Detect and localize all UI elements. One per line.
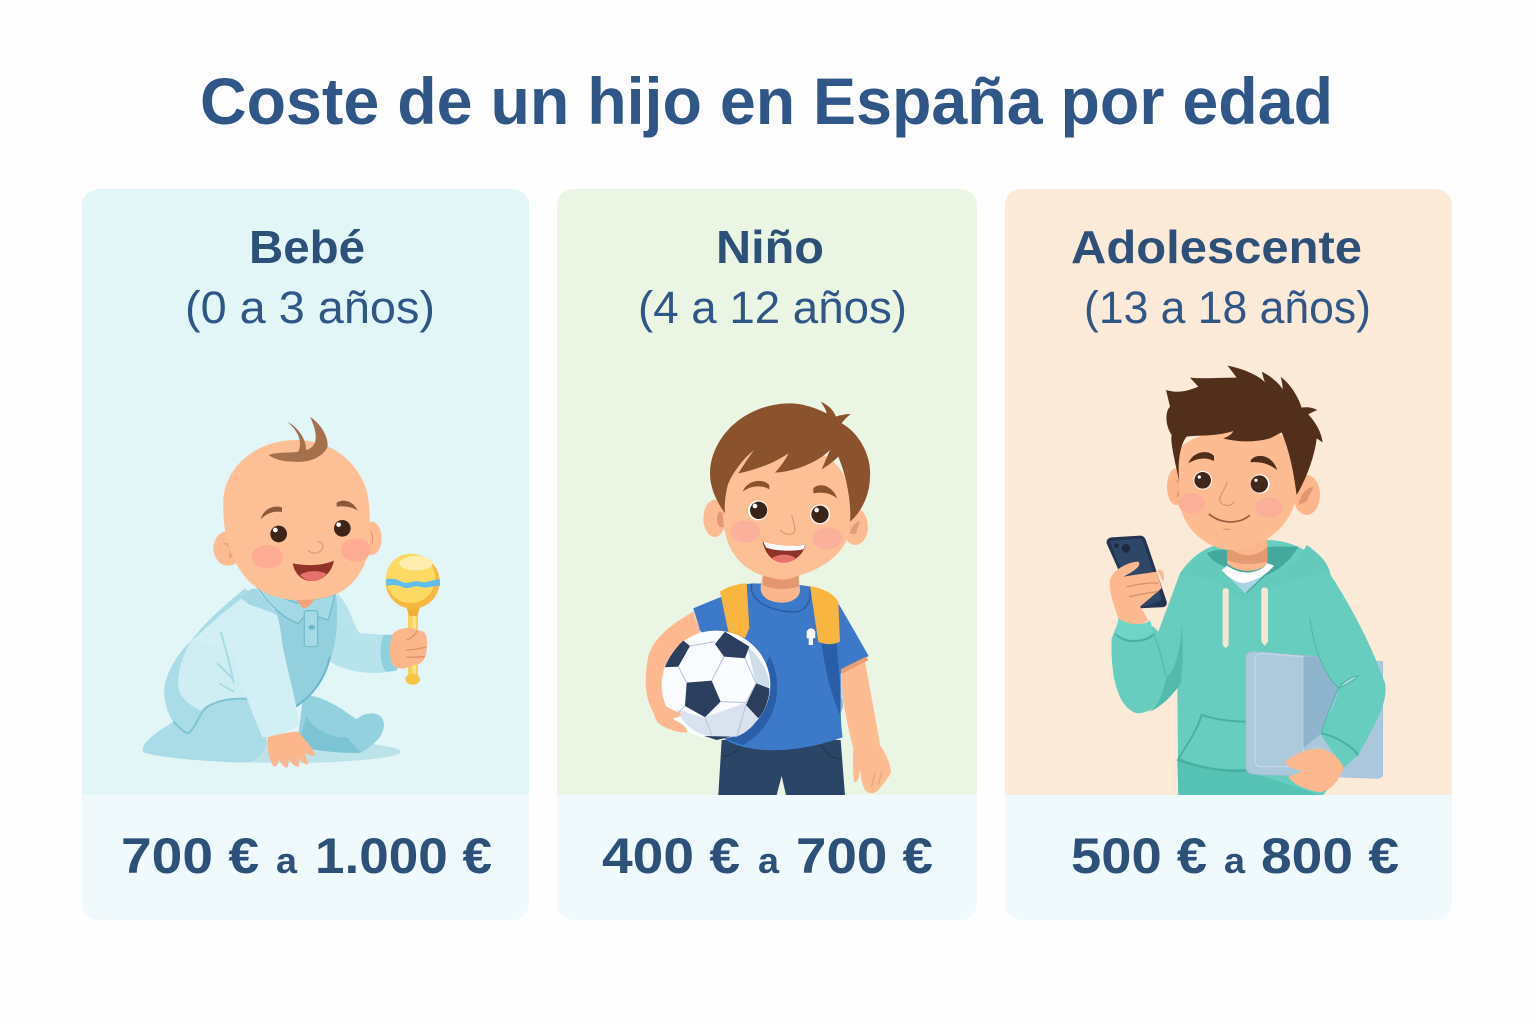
boy head: [723, 445, 850, 578]
card background: bebé: [82, 189, 529, 795]
age range: adolescente: (13 a 18 años): [1084, 282, 1371, 333]
panel: bebé: [82, 189, 529, 920]
teen drawstrings: [1223, 587, 1268, 648]
price: adolescente: 800 €: [1261, 828, 1399, 884]
price: adolescente: a: [1224, 840, 1246, 881]
collar and placket: [258, 588, 335, 647]
teen phone hand: [1110, 562, 1162, 625]
boy shadow behind ball: [723, 657, 777, 745]
card background: adolescente: [1005, 189, 1452, 795]
baby rattle hand: [390, 628, 427, 669]
boy shirt badge: [807, 628, 815, 645]
price: bebé: 1.000 €: [315, 828, 492, 884]
boy near arm: [646, 612, 700, 733]
baby face: [252, 501, 371, 581]
baby head: [223, 440, 370, 600]
price: niño: 400 €: [602, 828, 740, 884]
age range: niño: (4 a 12 años): [638, 282, 907, 333]
heading: niño: Niño: [716, 221, 824, 273]
teen phone: [1107, 536, 1167, 608]
panel: adolescente: [1005, 189, 1452, 920]
teen hood interior: [1207, 547, 1298, 593]
illustration: boy with football: [646, 402, 891, 795]
teen hair: [1166, 366, 1323, 495]
panel: niño: [557, 189, 977, 920]
teen face: [1178, 452, 1283, 529]
baby ears: [213, 522, 382, 566]
baby hair: [268, 417, 328, 462]
card background: niño: [557, 189, 977, 795]
price: bebé: a: [276, 840, 298, 881]
price band: adolescente: [1005, 795, 1452, 920]
boy shorts: [718, 740, 845, 795]
boy t-shirt: [693, 583, 869, 750]
teen near arm: [1303, 575, 1386, 768]
teen hoodie body: [1111, 540, 1386, 795]
price band: bebé: [82, 795, 529, 920]
age range: bebé: (0 a 3 años): [185, 282, 435, 333]
heading: adolescente: Adolescente: [1071, 221, 1362, 273]
price: niño: 700 €: [796, 828, 933, 884]
teen hand on tablet: [1285, 748, 1343, 792]
boy ears: [703, 500, 868, 545]
boy hand on ball: [653, 697, 687, 732]
teen ears: [1167, 468, 1320, 515]
price: bebé: [121, 828, 492, 884]
teen neck and t-shirt: [1227, 538, 1267, 571]
title: Coste de un hijo en España por edad: [200, 64, 1333, 138]
boy neck: [761, 570, 800, 603]
heading: bebé: Bebé: [249, 221, 365, 273]
price: bebé: 700 €: [121, 828, 259, 884]
price: adolescente: 500 €: [1071, 828, 1207, 884]
boy backpack straps: [720, 583, 840, 644]
illustration: baby with rattle: [143, 417, 440, 767]
boy face: [730, 481, 842, 563]
price: adolescente: [1071, 828, 1399, 884]
illustration: teenager with phone and tablet: [1107, 366, 1386, 795]
teen tablet: [1246, 652, 1383, 778]
price: niño: a: [758, 840, 780, 881]
boy far arm: [840, 661, 891, 793]
boy hair: [710, 402, 870, 522]
boy backpack side strap: [823, 643, 843, 717]
baby near hand: [268, 732, 315, 767]
football: [662, 631, 770, 740]
rattle: [386, 554, 440, 685]
price band: niño: [557, 795, 977, 920]
teen head: [1178, 429, 1297, 550]
price: niño: [602, 828, 933, 884]
